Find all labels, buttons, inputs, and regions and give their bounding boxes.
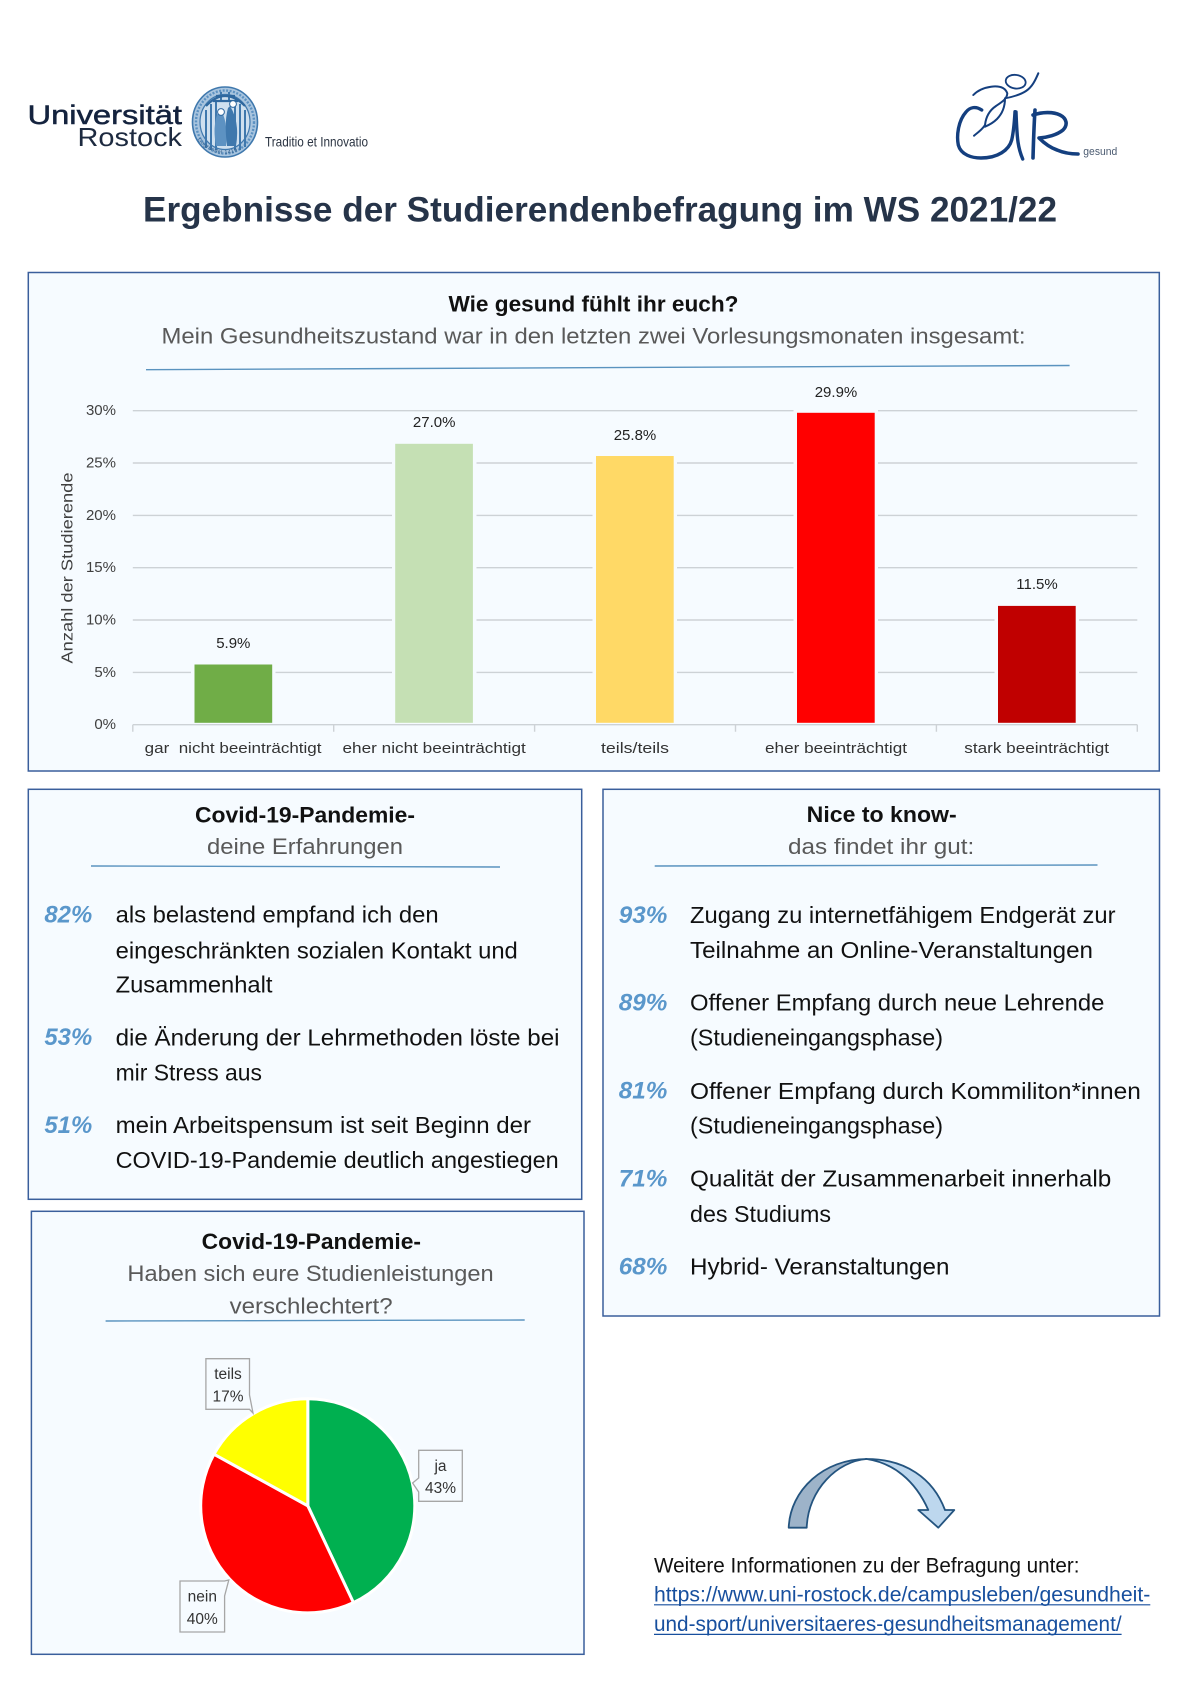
panel subheading bbox=[127, 1261, 494, 1319]
item 51% bbox=[44, 1112, 559, 1173]
item 93%: Zugang zu internetfähigem Endgerät zur bbox=[690, 902, 1116, 928]
item 71%: Qualität der Zusammenarbeit innerhalb bbox=[690, 1165, 1111, 1191]
item 89% bbox=[619, 990, 1104, 1050]
slice: teils 17% bbox=[214, 1399, 308, 1506]
callout: ja 43%: ja bbox=[433, 1458, 447, 1475]
item 89%: 89% bbox=[619, 990, 667, 1017]
item 51%: 51% bbox=[44, 1112, 92, 1139]
data labels: 29.9% bbox=[815, 384, 857, 401]
item 53% bbox=[44, 1024, 559, 1086]
icon: university seal bbox=[192, 86, 258, 158]
further information text bbox=[654, 1554, 1150, 1636]
link text: https://www.uni-rostock.de/campusleben/gesundheit- bbox=[654, 1583, 1150, 1606]
y axis labels: 15% bbox=[86, 559, 116, 576]
x axis labels: gar nicht beeinträchtigt bbox=[145, 740, 322, 757]
figure body and arms bbox=[973, 73, 1038, 136]
y axis labels: 0% bbox=[94, 716, 116, 733]
letter U stem bbox=[1016, 112, 1023, 159]
x axis labels bbox=[145, 740, 1110, 757]
panel: Wie gesund fühlt ihr euch bbox=[28, 272, 1159, 771]
bar: eher beeinträchtigt 29.9% bbox=[797, 413, 875, 723]
y axis labels: 30% bbox=[86, 402, 116, 419]
panel heading: Covid-19-Pandemie- bbox=[195, 803, 415, 828]
letter C and U stroke bbox=[958, 108, 1015, 158]
item 51%: COVID-19-Pandemie deutlich angestiegen bbox=[116, 1147, 559, 1173]
callout: teils 17%: 17% bbox=[212, 1388, 244, 1406]
arrow: curved down bbox=[789, 1459, 954, 1528]
y axis labels bbox=[86, 402, 116, 733]
item 82% bbox=[44, 902, 518, 997]
item 81% bbox=[619, 1078, 1141, 1139]
logo wordmark: Universität bbox=[28, 100, 183, 130]
item 71% bbox=[619, 1165, 1111, 1227]
item 89%: (Studieneingangsphase) bbox=[690, 1024, 943, 1050]
panel: Covid-19 Erfahrungen bbox=[28, 789, 582, 1199]
item 71%: des Studiums bbox=[690, 1201, 831, 1227]
callout: ja 43% bbox=[413, 1450, 462, 1501]
slice: nein 40% bbox=[201, 1454, 353, 1613]
item 53%: 53% bbox=[44, 1024, 92, 1051]
title: Ergebnisse der Studierendenbefragung im WS 2021/22 bbox=[143, 190, 1057, 230]
icon: university seal: Gegründet 1419 bbox=[198, 138, 237, 154]
callout: nein 40% bbox=[180, 1580, 229, 1632]
x axis labels: teils/teils bbox=[601, 740, 669, 757]
item 82%: eingeschränkten sozialen Kontakt und bbox=[116, 938, 518, 964]
panel subheading: deine Erfahrungen bbox=[207, 834, 403, 859]
callout: teils 17% bbox=[206, 1359, 253, 1413]
y axis labels: 25% bbox=[86, 454, 116, 472]
bar: gar nicht beeinträchtigt 5.9% bbox=[194, 664, 272, 723]
callout: teils 17%: teils bbox=[214, 1366, 242, 1383]
item 71%: 71% bbox=[619, 1165, 667, 1192]
bar: eher nicht beeinträchtigt 27.0% bbox=[395, 444, 473, 723]
panel subheading: Haben sich eure Studienleistungen bbox=[127, 1261, 494, 1286]
item 51%: mein Arbeitspensum ist seit Beginn der bbox=[116, 1112, 531, 1138]
gesund label: gesund bbox=[1083, 146, 1117, 158]
pie chart bbox=[201, 1399, 415, 1613]
y axis title: Anzahl der Studierende bbox=[60, 472, 77, 664]
motto: Traditio et Innovatio bbox=[265, 134, 368, 150]
item 81%: Offener Empfang durch Kommiliton*innen bbox=[690, 1078, 1141, 1104]
item 53%: die Änderung der Lehrmethoden löste bei bbox=[116, 1024, 559, 1050]
callout: nein 40%: 40% bbox=[187, 1611, 218, 1628]
panel heading: Covid-19-Pandemie- bbox=[202, 1229, 421, 1254]
logo: UR gesund bbox=[958, 73, 1117, 159]
item 53%: mir Stress aus bbox=[116, 1060, 262, 1086]
item 81%: (Studieneingangsphase) bbox=[690, 1113, 943, 1139]
item 82%: 82% bbox=[44, 902, 92, 929]
bar chart bbox=[60, 384, 1137, 757]
y axis labels: 20% bbox=[86, 507, 116, 524]
y axis labels: 10% bbox=[86, 612, 116, 628]
item 82%: Zusammenhalt bbox=[116, 971, 273, 997]
panel heading: Wie gesund fühlt ihr euch? bbox=[448, 292, 738, 316]
bar: teils/teils 25.8% bbox=[596, 456, 674, 723]
panel subheading: Mein Gesundheitszustand war in den letzten zwei Vorlesungsmonaten insgesamt: bbox=[162, 324, 1026, 348]
item 89%: Offener Empfang durch neue Lehrende bbox=[690, 990, 1104, 1016]
callout: nein 40%: nein bbox=[188, 1589, 217, 1606]
x axis labels: stark beeinträchtigt bbox=[964, 740, 1110, 757]
bar gaps bbox=[191, 409, 1079, 723]
data labels: 25.8% bbox=[614, 427, 656, 444]
callout: ja 43%: 43% bbox=[425, 1480, 456, 1497]
data labels: 11.5% bbox=[1016, 576, 1058, 593]
logo: Universität Rostock bbox=[28, 86, 368, 158]
panel: Nice to know bbox=[603, 789, 1160, 1316]
panel: Studienleistungen bbox=[31, 1211, 584, 1654]
x axis labels: eher beeinträchtigt bbox=[765, 740, 908, 757]
logo wordmark: Rostock bbox=[78, 122, 183, 152]
letter R bbox=[1033, 110, 1078, 158]
link text: und-sport/universitaeres-gesundheitsmanagement/ bbox=[654, 1613, 1122, 1636]
further information text: Weitere Informationen zu der Befragung unter: bbox=[654, 1554, 1080, 1578]
item 93% bbox=[619, 902, 1116, 963]
item 68%: Hybrid- Veranstaltungen bbox=[690, 1254, 949, 1280]
item 93%: Teilnahme an Online-Veranstaltungen bbox=[690, 937, 1093, 963]
data labels: 27.0% bbox=[413, 414, 455, 431]
data labels bbox=[216, 384, 1058, 652]
bar: stark beeinträchtigt 11.5% bbox=[998, 606, 1076, 723]
item 82%: als belastend empfand ich den bbox=[116, 902, 439, 928]
slice: ja 43% bbox=[308, 1399, 415, 1603]
link text bbox=[654, 1583, 1150, 1636]
panel heading: Nice to know- bbox=[807, 802, 957, 827]
y axis labels: 5% bbox=[94, 664, 116, 681]
panel subheading: das findet ihr gut: bbox=[788, 834, 974, 859]
panel subheading: verschlechtert? bbox=[230, 1294, 393, 1319]
logo wordmark bbox=[28, 100, 183, 152]
item 68%: 68% bbox=[619, 1253, 667, 1280]
data labels: 5.9% bbox=[216, 635, 250, 652]
x axis labels: eher nicht beeinträchtigt bbox=[342, 740, 527, 757]
figure head bbox=[1005, 74, 1027, 90]
item 81%: 81% bbox=[619, 1078, 667, 1105]
item 93%: 93% bbox=[619, 902, 667, 929]
